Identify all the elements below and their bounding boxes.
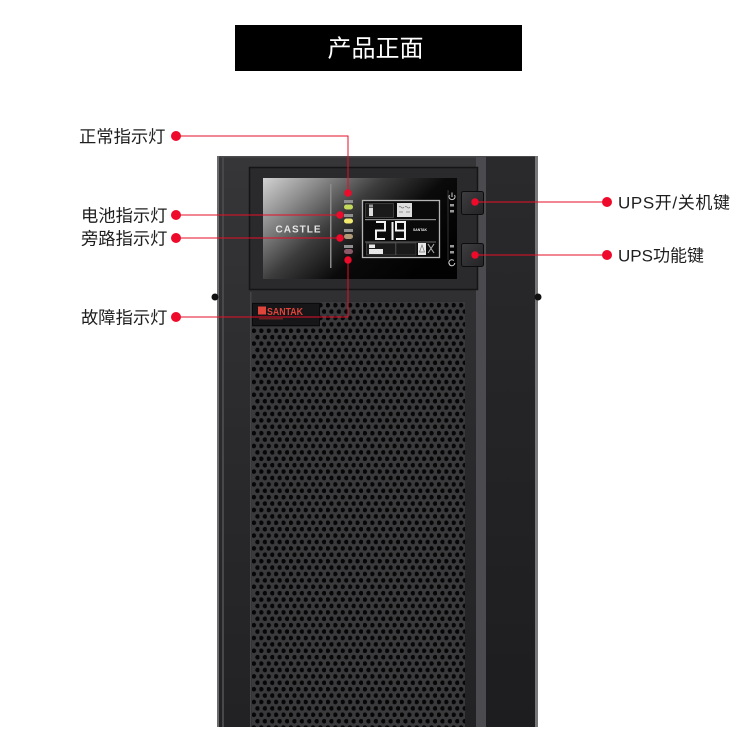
LCD screen bbox=[362, 200, 440, 258]
title banner bbox=[235, 25, 522, 71]
indicator lights bbox=[344, 200, 353, 254]
SANTAK logo plate: SANTAK bbox=[267, 307, 304, 318]
perforated mesh grille bbox=[252, 302, 465, 727]
callout: normal indicator: 正常指示灯 bbox=[79, 126, 165, 146]
power button bbox=[462, 192, 484, 214]
glass display panel bbox=[263, 178, 457, 279]
title banner: 产品正面 bbox=[328, 36, 424, 62]
callout: UPS function key bbox=[471, 246, 704, 266]
function button bbox=[462, 244, 484, 266]
SANTAK mark on LCD: SANTAK bbox=[413, 228, 427, 232]
panel symbols bbox=[448, 190, 455, 266]
callout: UPS function key: UPS功能键 bbox=[618, 246, 704, 266]
callout: bypass indicator bbox=[81, 228, 344, 248]
CASTLE wordmark: CASTLE bbox=[276, 224, 322, 236]
SANTAK logo plate bbox=[252, 302, 320, 327]
voltage reading 219 bbox=[376, 222, 405, 240]
callout: normal indicator bbox=[79, 126, 352, 197]
callout: UPS power key bbox=[471, 194, 730, 212]
control panel frame bbox=[250, 168, 478, 290]
UPS cabinet front bbox=[212, 156, 542, 727]
callout: battery indicator: 电池指示灯 bbox=[81, 206, 167, 226]
cabinet body bbox=[212, 156, 542, 727]
callout: fault indicator bbox=[81, 256, 352, 328]
callout: UPS power key: UPS开/关机键 bbox=[618, 194, 730, 212]
callout: bypass indicator: 旁路指示灯 bbox=[81, 228, 167, 248]
callout: battery indicator bbox=[81, 206, 344, 226]
callout: fault indicator: 故障指示灯 bbox=[81, 308, 167, 328]
